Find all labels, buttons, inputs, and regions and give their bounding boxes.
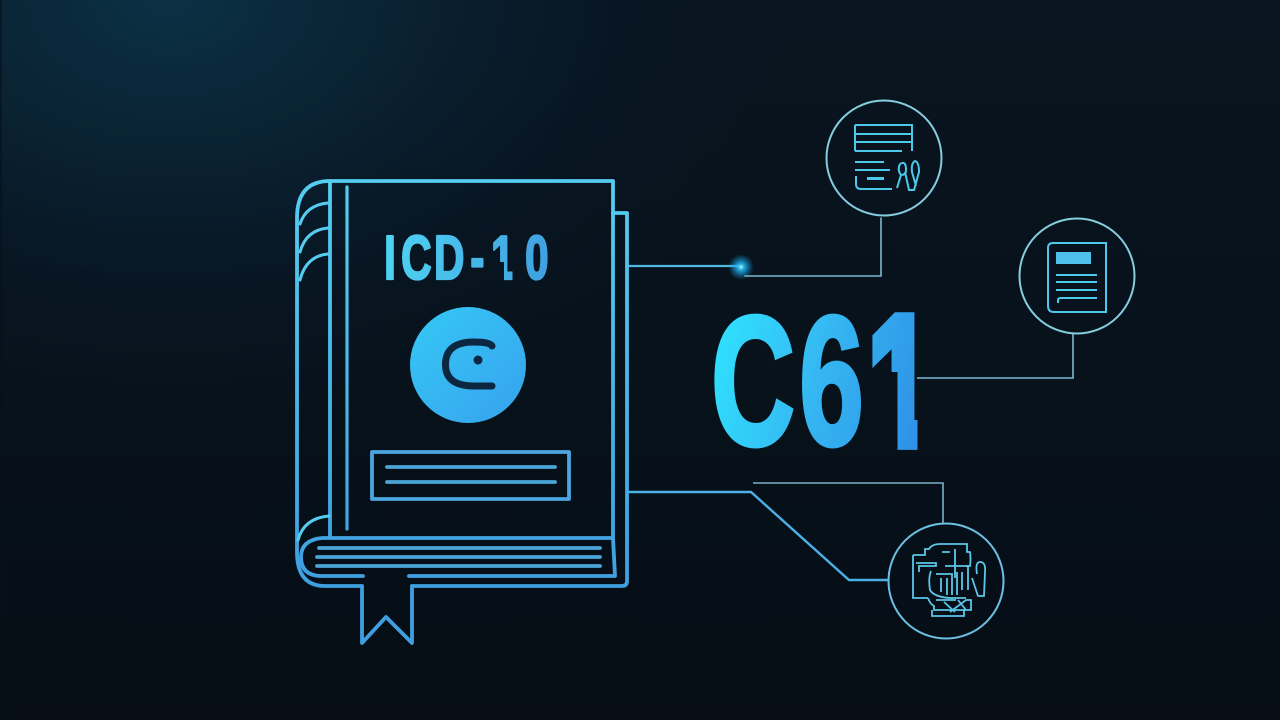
page block xyxy=(301,538,615,576)
code: C61: C61 xyxy=(711,278,932,484)
page lines xyxy=(317,548,600,566)
book spine and back cover xyxy=(297,181,627,586)
cover inner line xyxy=(345,187,349,529)
connector: book to third icon xyxy=(628,483,943,580)
connector: book to first icon xyxy=(628,218,881,280)
connector: C61 to second icon xyxy=(917,334,1073,378)
title: ICD-10: ICD-10 xyxy=(384,224,549,293)
book illustration xyxy=(297,181,627,643)
label plate xyxy=(372,452,569,499)
icon: document with figure xyxy=(826,100,942,216)
spine ribs xyxy=(298,203,329,540)
emblem disc xyxy=(410,307,526,423)
front cover xyxy=(330,181,613,538)
icon: report page xyxy=(1020,218,1134,334)
icon: medical equipment xyxy=(888,524,1004,638)
bookmark xyxy=(362,586,412,643)
